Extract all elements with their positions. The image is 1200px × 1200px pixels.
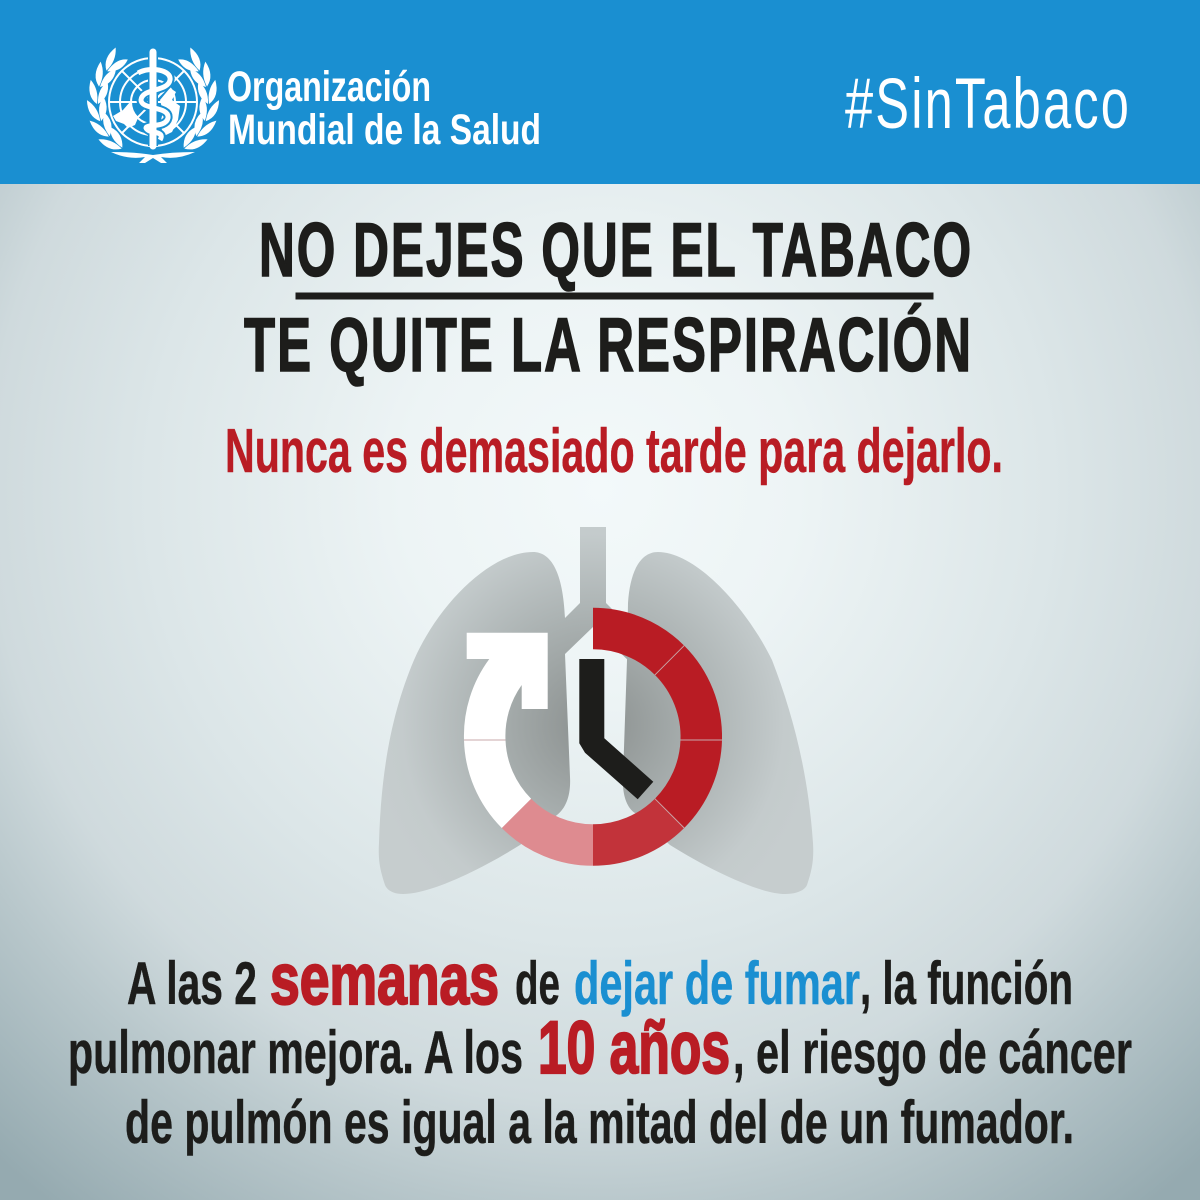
clock ring: [464, 608, 722, 866]
organization name: [227, 63, 541, 154]
body text: , la función: [860, 950, 1073, 1017]
organization name: Organización: [227, 63, 431, 111]
body text: 10 años: [538, 1006, 730, 1089]
clock hands: [579, 659, 653, 799]
body text: dejar de fumar: [574, 950, 860, 1017]
organization name: Mundial de la Salud: [228, 106, 541, 154]
wreath right: [176, 47, 220, 155]
continents: [113, 88, 180, 136]
body text: pulmonar mejora. A los: [68, 1019, 523, 1086]
lungs: [379, 527, 813, 894]
body text: de: [515, 950, 560, 1017]
WHO logo emblem: [86, 47, 220, 163]
ribbon: [111, 152, 195, 163]
staff and serpent: [138, 52, 170, 146]
body text: A las 2: [127, 950, 257, 1017]
trachea: [565, 527, 630, 662]
globe: [109, 58, 197, 146]
body text: semanas: [270, 940, 499, 1020]
title: [244, 208, 973, 388]
wreath left: [86, 47, 130, 155]
body text: [68, 940, 1132, 1156]
lungs and clock illustration: [379, 527, 813, 894]
header band: [0, 0, 1200, 184]
